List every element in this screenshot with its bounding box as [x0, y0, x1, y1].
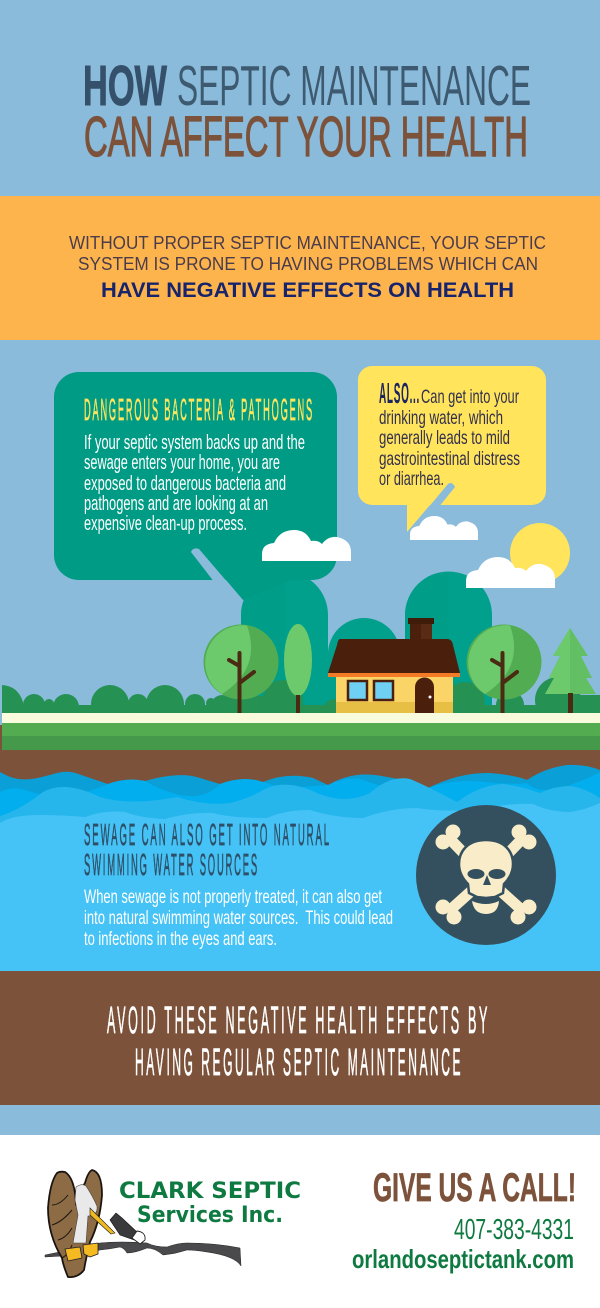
- logo: eagle on branch: [45, 1170, 241, 1277]
- illustration: clouds: [262, 516, 555, 588]
- title: HOW: [83, 54, 167, 118]
- text block: contact details: [352, 1166, 576, 1274]
- panel: dangerous bacteria speech bubble: If your septic system backs up and the: [84, 432, 305, 454]
- illustration: pine tree: [545, 628, 596, 713]
- text block: sewage in swimming water: into natural swimming water sources. This could lead: [84, 907, 393, 929]
- icon: skull and crossbones: [416, 805, 556, 945]
- panel: dangerous bacteria speech bubble: expensive clean-up process.: [84, 513, 247, 535]
- illustration: hedge: [2, 677, 600, 723]
- panel: dangerous bacteria speech bubble: sewage enters your home, you are: [84, 452, 280, 474]
- text block: sewage in swimming water: to infections in the eyes and ears.: [84, 928, 277, 950]
- logo: company name: Services Inc.: [137, 1203, 283, 1228]
- illustration: oval tree: [284, 624, 312, 713]
- panel: also speech bubble: gastrointestinal distress: [379, 448, 520, 470]
- panel: also speech bubble: generally leads to mild: [379, 427, 510, 449]
- panel: also speech bubble: ALSO...: [379, 378, 420, 410]
- illustration: soil and water waves: [0, 750, 600, 971]
- text block: sewage in swimming water: When sewage is not properly treated, it can also get: [84, 886, 382, 908]
- panel: also speech bubble: Can get into your: [421, 386, 519, 408]
- panel: orange intro band: SYSTEM IS PRONE TO HAVING PROBLEMS WHICH CAN: [78, 254, 538, 274]
- panel: dangerous bacteria speech bubble: [54, 372, 337, 600]
- illustration: right round tree: [466, 624, 542, 713]
- illustration: ground stripes: [0, 713, 600, 755]
- panel: dangerous bacteria speech bubble: pathogens and are looking at an: [84, 493, 268, 515]
- illustration: sun: [510, 523, 570, 583]
- panel: orange intro band: HAVE NEGATIVE EFFECTS ON HEALTH: [101, 279, 514, 302]
- panel: also speech bubble: [358, 366, 546, 532]
- text block: sewage in swimming water: [84, 817, 393, 950]
- illustration: house: [328, 618, 460, 713]
- panel: orange intro band: [0, 196, 600, 340]
- illustration: left round tree: [204, 624, 278, 713]
- illustration: teal background trees: [241, 572, 492, 715]
- title: [83, 54, 531, 169]
- logo: company name: [119, 1179, 301, 1228]
- panel: brown call to action band: [0, 971, 600, 1105]
- panel: dangerous bacteria speech bubble: exposed to dangerous bacteria and: [84, 473, 286, 495]
- logo: company name: CLARK SEPTIC: [119, 1179, 301, 1204]
- panel: also speech bubble: or diarrhea.: [379, 468, 444, 490]
- panel: white footer: [0, 1135, 600, 1308]
- panel: orange intro band: WITHOUT PROPER SEPTIC MAINTENANCE, YOUR SEPTIC: [69, 233, 546, 253]
- panel: also speech bubble: drinking water, which: [379, 407, 503, 429]
